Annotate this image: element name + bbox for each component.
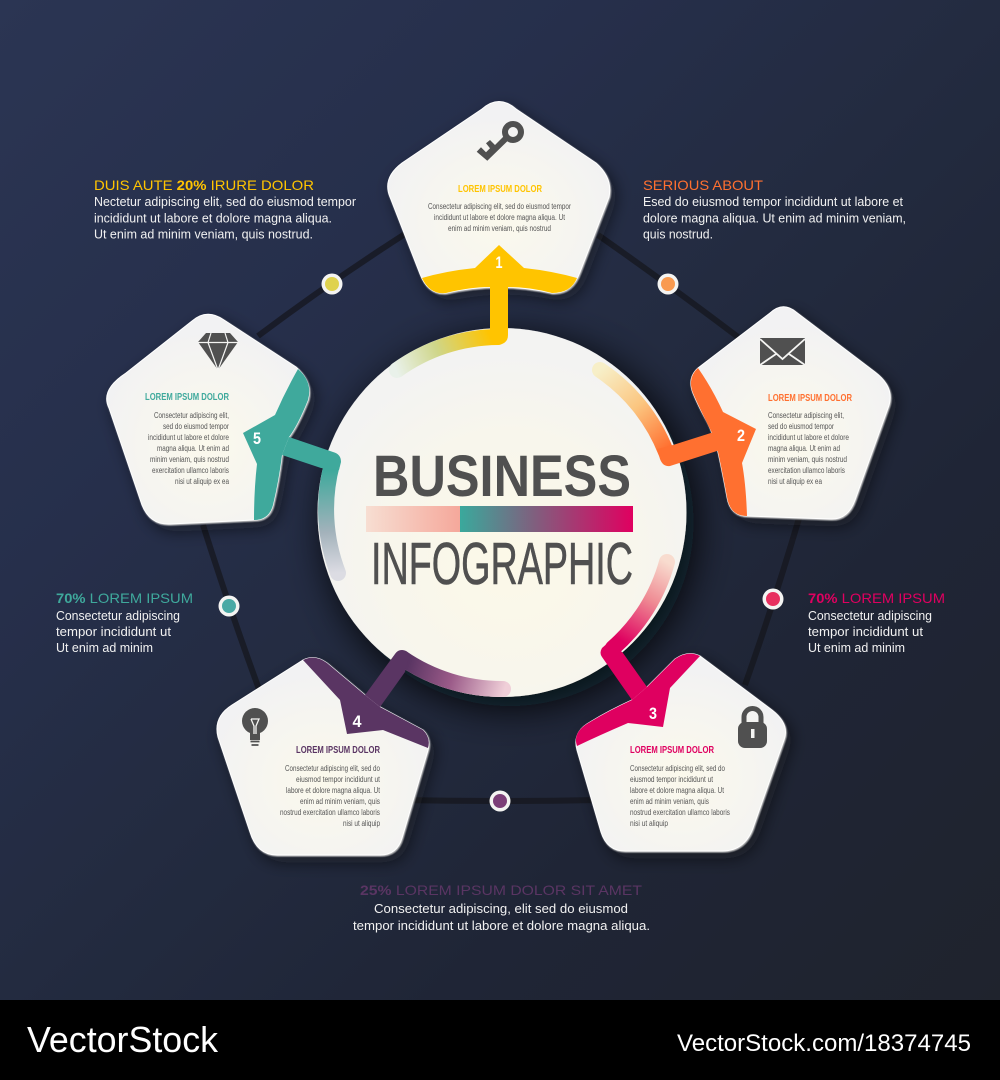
panel 4 body <box>280 764 381 828</box>
panel 1 body: Consectetur adipiscing elit, sed do eiusmod tempor <box>428 202 571 211</box>
icon: key <box>477 124 521 161</box>
connector dot: orange <box>658 274 678 294</box>
text block: bottom <box>353 882 650 933</box>
middle left body <box>56 609 180 655</box>
top right heading: SERIOUS ABOUT <box>643 177 763 193</box>
gradient arc 5 with stem <box>282 437 341 573</box>
panel 1 number: 1 <box>496 253 502 272</box>
middle left body: tempor incididunt ut <box>56 625 172 639</box>
panel 2 body: sed do eiusmod tempor <box>768 422 834 431</box>
gradient arc 4 with stem <box>365 650 503 707</box>
middle left body: Consectetur adipiscing <box>56 609 180 623</box>
panel 2 body: nisi ut aliquip ex ea <box>768 477 822 486</box>
top left heading: DUIS AUTE 20% IRURE DOLOR <box>94 177 314 193</box>
panel 2 body: exercitation ullamco laboris <box>768 466 845 475</box>
panel 2 body: minim veniam, quis nostrud <box>768 455 847 464</box>
panel 4 heading: LOREM IPSUM DOLOR <box>296 745 381 756</box>
panel 4 shape <box>217 658 429 855</box>
panel 4 number: 4 <box>352 712 362 731</box>
bottom body: tempor incididunt ut labore et dolore magna aliqua. <box>353 919 650 933</box>
panel 4 purple band <box>303 658 429 748</box>
top right body <box>643 195 906 242</box>
top left body: incididunt ut labore et dolore magna aliqua. <box>94 212 332 226</box>
panel 5 body <box>148 411 229 486</box>
middle right body: Consectetur adipiscing <box>808 609 932 623</box>
panel 5 body: nisi ut aliquip ex ea <box>175 477 229 486</box>
panel 4 body: Consectetur adipiscing elit, sed do <box>285 764 380 773</box>
text block: top right <box>643 177 906 242</box>
bottom heading: 25% LOREM IPSUM DOLOR SIT AMET <box>360 882 642 898</box>
bottom body <box>353 902 650 933</box>
panel 4 body: eiusmod tempor incididunt ut <box>296 775 381 784</box>
panel 2 body: Consectetur adipiscing elit, <box>768 411 844 420</box>
panel 5 number: 5 <box>253 429 261 448</box>
panel 1: key <box>388 102 610 345</box>
panel 5 heading: LOREM IPSUM DOLOR <box>145 392 230 403</box>
gradient arc 2 with stem <box>600 370 720 466</box>
icon: light bulb <box>242 708 268 745</box>
title: INFOGRAPHIC: INFOGRAPHIC <box>371 531 633 597</box>
panel 3 shape <box>576 654 786 851</box>
middle right body: tempor incididunt ut <box>808 625 924 639</box>
icon: diamond <box>198 333 238 370</box>
panel 4 body: labore et dolore magna aliqua. Ut <box>286 786 381 795</box>
connector dot: yellow <box>322 274 342 294</box>
text block: middle left <box>56 590 193 655</box>
panel 2 shape <box>691 307 890 519</box>
panel 5 body: minim veniam, quis nostrud <box>150 455 229 464</box>
panel 4 body: nostrud exercitation ullamco laboris <box>280 808 380 817</box>
panel 3 heading: LOREM IPSUM DOLOR <box>630 745 715 756</box>
icon: envelope <box>760 338 805 365</box>
text block: middle right <box>808 590 945 655</box>
middle right heading: 70% LOREM IPSUM <box>808 590 945 606</box>
text block: top left <box>94 177 356 242</box>
panel 4 body: nisi ut aliquip <box>343 819 380 828</box>
panel 1 body <box>428 202 571 233</box>
panel 4: bulb <box>217 658 429 855</box>
panel 5 body: Consectetur adipiscing elit, <box>154 411 229 420</box>
middle left body: Ut enim ad minim <box>56 641 153 655</box>
footer logo text: VectorStock <box>27 1019 219 1060</box>
panel 3 body: eiusmod tempor incididunt ut <box>630 775 714 784</box>
middle left heading: 70% LOREM IPSUM <box>56 590 193 606</box>
icon: lock <box>738 708 767 748</box>
panel 2 orange band <box>691 368 756 516</box>
panel 1 shape <box>388 102 610 293</box>
top right body: quis nostrud. <box>643 228 713 242</box>
panel 1 body: incididunt ut labore et dolore magna aliqua. Ut <box>434 213 566 222</box>
panel 3 body: labore et dolore magna aliqua. Ut <box>630 786 725 795</box>
watermark footer <box>0 1000 1000 1080</box>
connector dot: teal <box>218 596 240 616</box>
top left body: Ut enim ad minim veniam, quis nostrud. <box>94 228 313 242</box>
gradient arc 1 <box>397 337 498 370</box>
panel 2 body <box>768 411 849 486</box>
panel 3 body: Consectetur adipiscing elit, sed do <box>630 764 725 773</box>
top left body: Nectetur adipiscing elit, sed do eiusmod tempor <box>94 195 356 209</box>
top left body <box>94 195 356 242</box>
panel 3: lock <box>576 654 786 851</box>
panel 5 teal band <box>243 369 309 520</box>
panel 3 body: nostrud exercitation ullamco laboris <box>630 808 730 817</box>
bottom body: Consectetur adipiscing, elit sed do eiusmod <box>374 902 628 916</box>
gradient arc 3 with stem <box>600 562 667 700</box>
central circle <box>318 328 686 697</box>
top right body: dolore magna aliqua. Ut enim ad minim veniam, <box>643 212 906 226</box>
middle right body <box>808 609 932 655</box>
panel 5 shape <box>107 314 309 524</box>
footer url text: VectorStock.com/18374745 <box>677 1030 971 1057</box>
panel 3 pink band <box>576 654 700 746</box>
top right body: Esed do eiusmod tempor incididunt ut labore et <box>643 195 904 209</box>
panel 2 body: magna aliqua. Ut enim ad <box>768 444 840 453</box>
panel 2 heading: LOREM IPSUM DOLOR <box>768 393 853 404</box>
connector dot: purple <box>490 790 510 812</box>
panel 4 body: enim ad minim veniam, quis <box>300 797 380 806</box>
panel 5 body: incididunt ut labore et dolore <box>148 433 229 442</box>
panel 2: envelope <box>691 307 890 519</box>
panel 3 body: enim ad minim veniam, quis <box>630 797 709 806</box>
panel 3 number: 3 <box>649 704 657 723</box>
panel 5 body: sed do eiusmod tempor <box>163 422 229 431</box>
connector dot: pink <box>762 588 784 610</box>
title <box>366 444 633 597</box>
panel 1 heading: LOREM IPSUM DOLOR <box>458 184 543 195</box>
panel 1 yellow band and stem <box>422 245 577 345</box>
middle right body: Ut enim ad minim <box>808 641 905 655</box>
title: BUSINESS: BUSINESS <box>373 444 631 509</box>
panel 5: diamond <box>107 314 309 524</box>
title bar <box>366 506 633 532</box>
panel 2 body: incididunt ut labore et dolore <box>768 433 849 442</box>
panel 3 body: nisi ut aliquip <box>630 819 668 828</box>
panel 1 body: enim ad minim veniam, quis nostrud <box>448 224 551 233</box>
panel 5 body: exercitation ullamco laboris <box>152 466 229 475</box>
panel 5 body: magna aliqua. Ut enim ad <box>157 444 229 453</box>
panel 2 number: 2 <box>737 426 745 445</box>
panel 3 body <box>630 764 730 828</box>
